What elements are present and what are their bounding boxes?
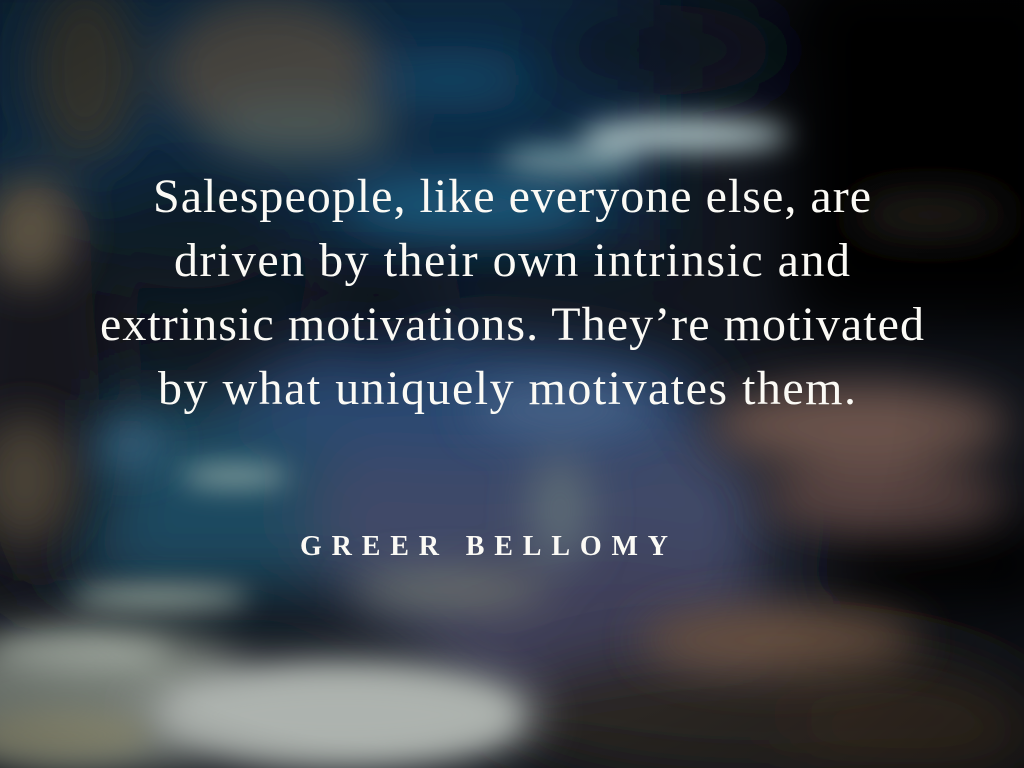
quote text: driven by their own intrinsic and	[174, 234, 850, 287]
quote text: Salespeople, like everyone else, are	[153, 170, 871, 223]
quote text: by what uniquely motivates them.	[158, 362, 856, 415]
quote text: extrinsic motivations. They’re motivated	[100, 298, 924, 351]
quote text	[100, 170, 924, 415]
attribution: author name: GREER BELLOMY	[300, 531, 668, 562]
